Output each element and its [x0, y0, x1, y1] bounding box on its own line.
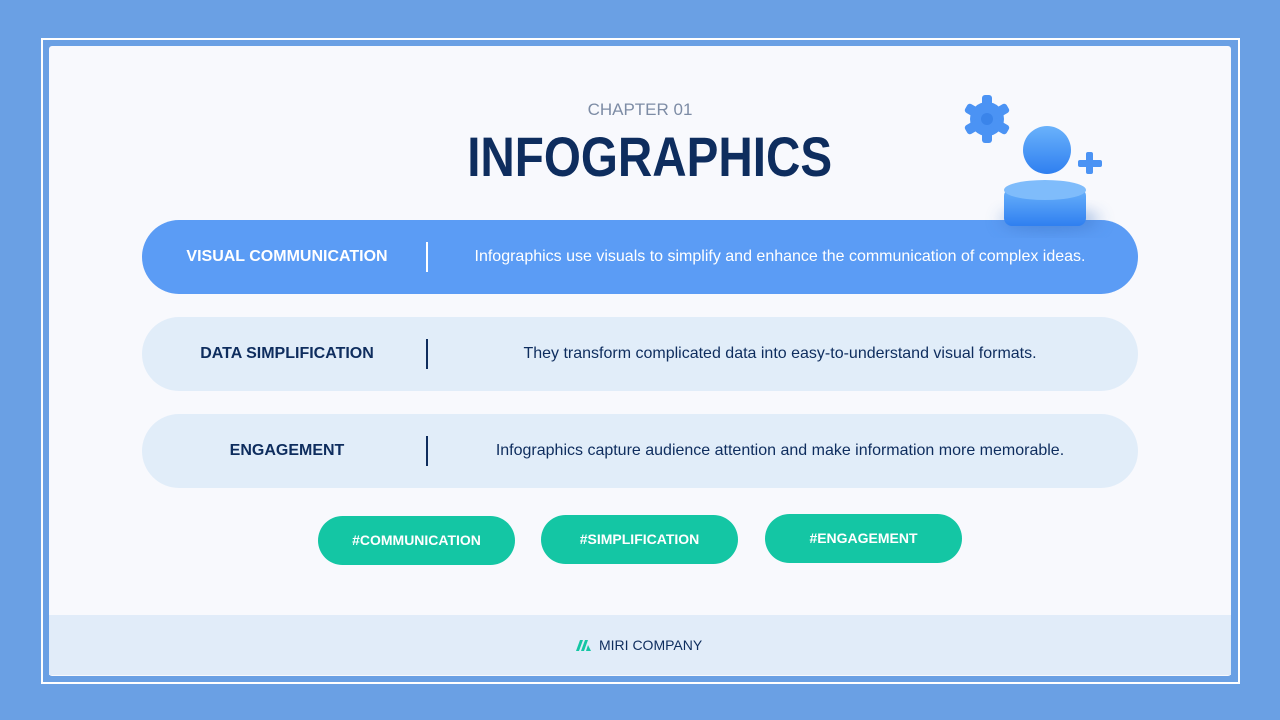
- chapter label: CHAPTER 01: [588, 100, 692, 119]
- footer brand: MIRI COMPANY: [599, 637, 702, 653]
- icon: logo: [576, 640, 591, 651]
- row: data simplification: [142, 317, 1138, 391]
- row: engagement: [142, 414, 1138, 488]
- row: data simplification: They transform complicated data into easy-to-understand visual formats.: [523, 345, 1037, 362]
- tag: communication: [318, 516, 515, 565]
- tag: engagement: #ENGAGEMENT: [809, 530, 918, 546]
- row: visual communication: VISUAL COMMUNICATION: [186, 248, 388, 265]
- tag: simplification: #SIMPLIFICATION: [580, 531, 699, 547]
- row: engagement: Infographics capture audience attention and make information more memorable.: [496, 442, 1064, 459]
- tag: simplification: [541, 515, 738, 564]
- tag: engagement: [765, 514, 962, 563]
- title: INFOGRAPHICS: [468, 125, 832, 188]
- row: visual communication: [142, 220, 1138, 294]
- tag: communication: #COMMUNICATION: [352, 532, 481, 548]
- icon: user add with gear: [964, 95, 1106, 234]
- row: visual communication: Infographics use visuals to simplify and enhance the communication of complex ideas.: [474, 248, 1086, 265]
- footer band: [49, 615, 1231, 675]
- row: engagement: ENGAGEMENT: [230, 442, 344, 459]
- row: data simplification: DATA SIMPLIFICATION: [200, 345, 374, 362]
